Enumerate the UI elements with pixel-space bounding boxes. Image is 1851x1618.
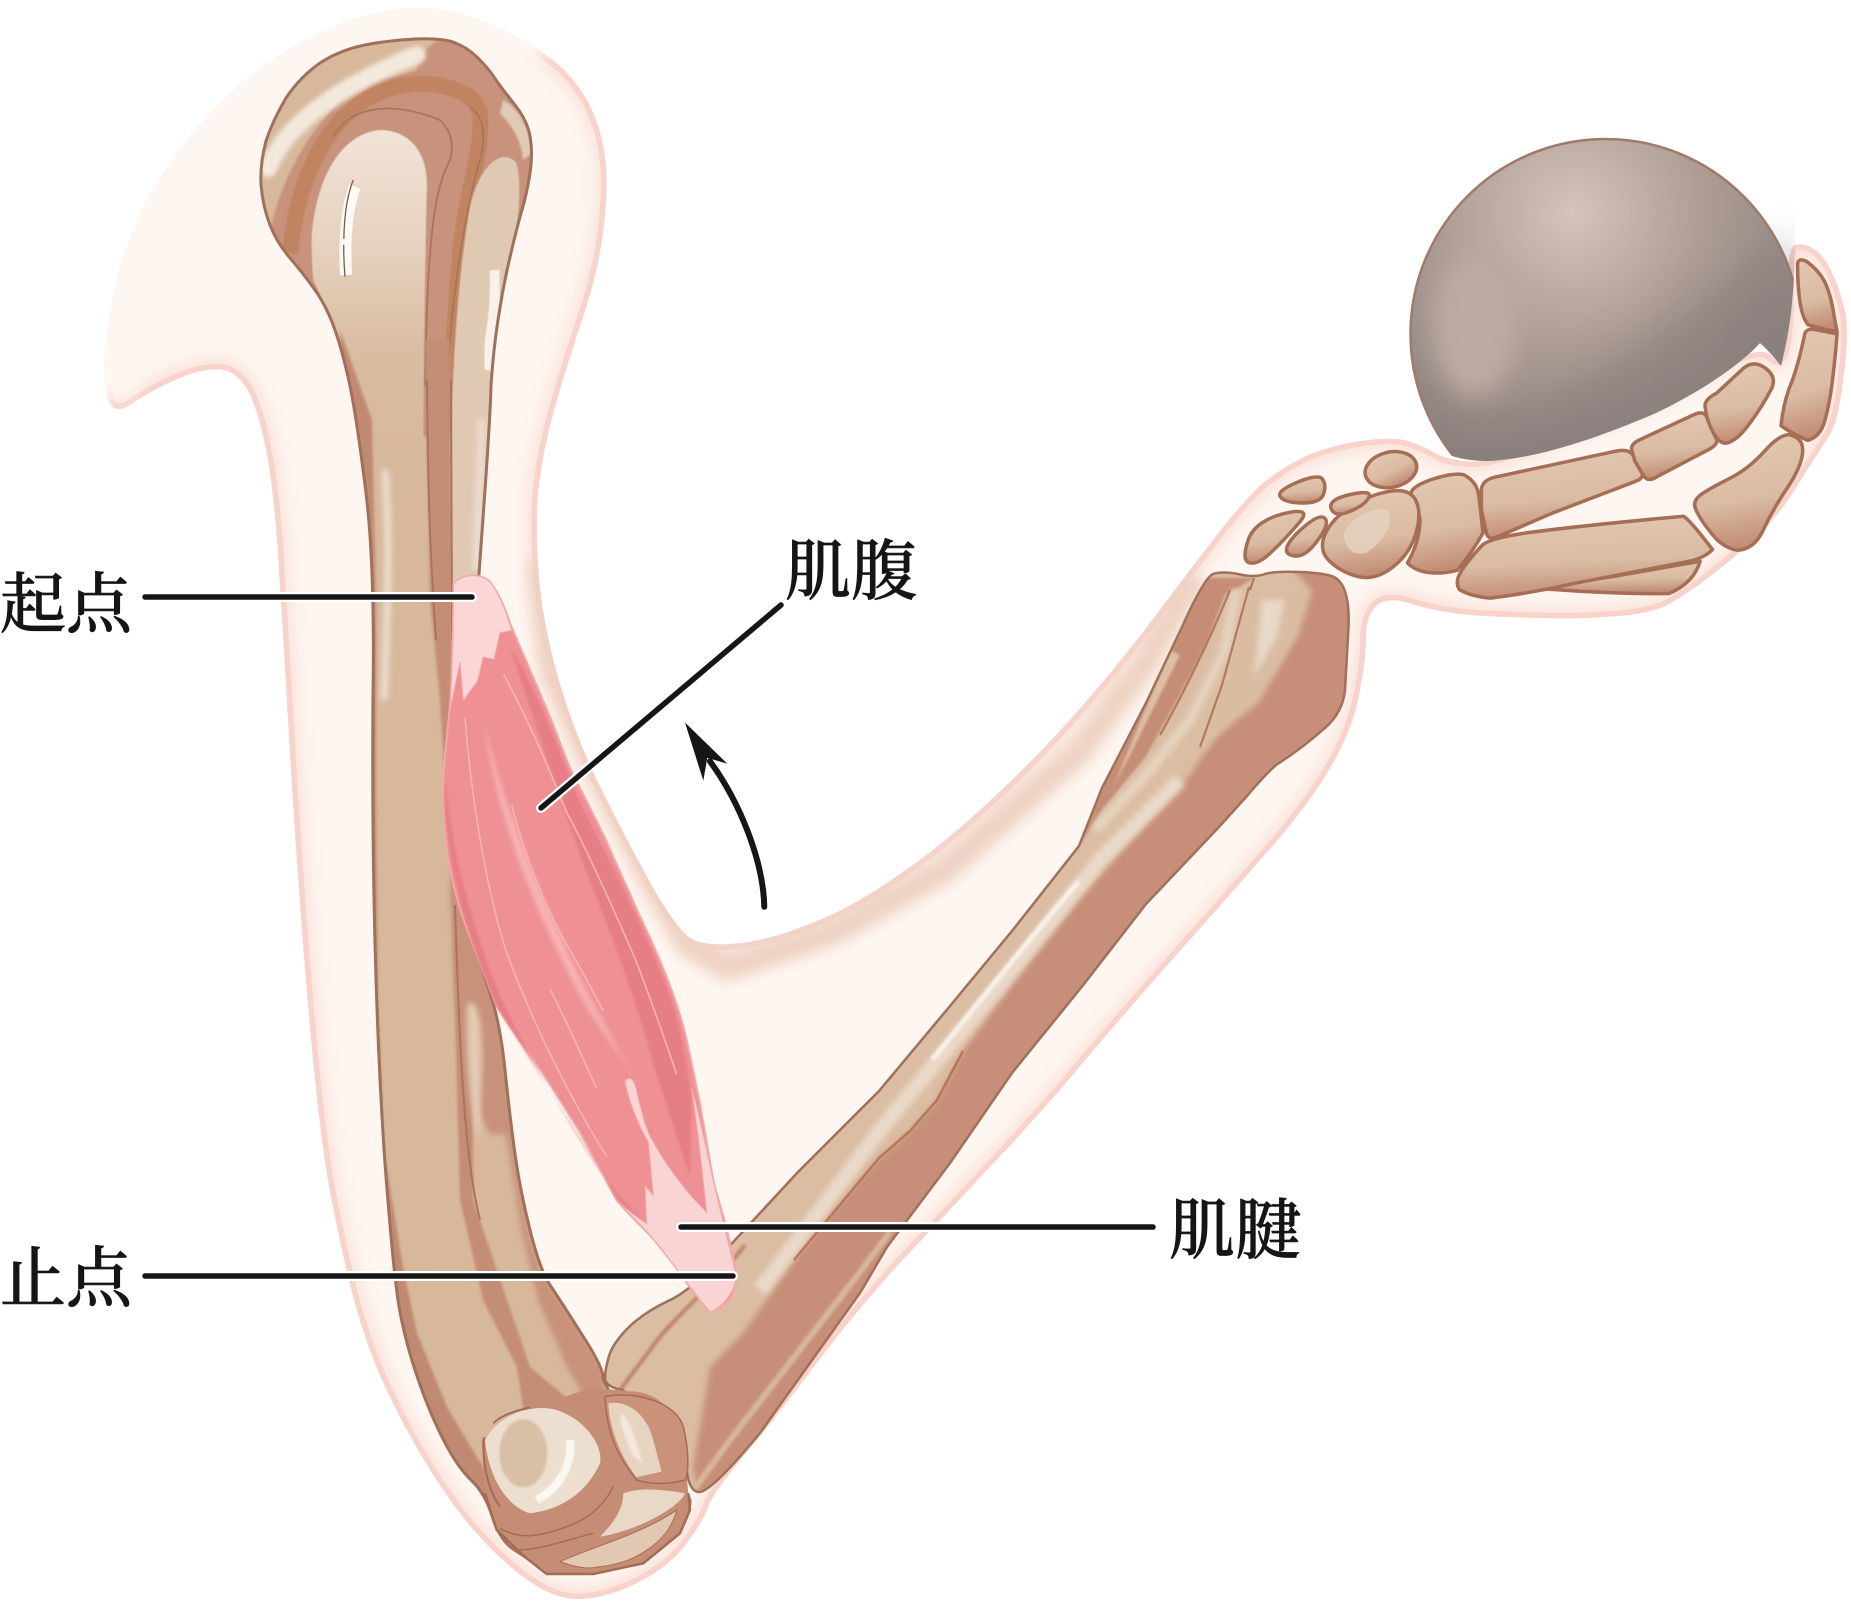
- shaft pale core: [311, 130, 428, 438]
- label: muscle belly: 肌腹: [785, 536, 917, 609]
- humerus right dark edge: [504, 1131, 606, 1392]
- forearm dark underside: [693, 565, 1370, 1500]
- muscle belly: [443, 576, 737, 1312]
- small carpal A: [1280, 477, 1325, 503]
- carpal highlight: [1343, 509, 1390, 554]
- wrist right pale: [1208, 734, 1219, 748]
- forearm lower thin strip: [695, 1232, 890, 1488]
- arrow: flexion direction: [685, 722, 764, 907]
- leader line: origin: [145, 592, 472, 602]
- wrist left dark band: [1079, 578, 1254, 846]
- forearm bones: [605, 565, 1370, 1500]
- forearm inner fold: [794, 1051, 963, 1260]
- right shaft pale: [452, 156, 520, 438]
- humerus head shading: [262, 41, 530, 438]
- small carpal D: [1286, 517, 1326, 556]
- small carpal C: [1245, 511, 1304, 563]
- humerus (upper arm bone): [261, 39, 690, 1573]
- thumb proximal phalanx: [1695, 435, 1803, 550]
- thumb middle phalanx: [1781, 329, 1837, 440]
- upper metacarpal: [1481, 450, 1642, 538]
- label: origin: 起点: [0, 569, 134, 642]
- muscle: biceps: [443, 576, 737, 1312]
- thumb distal phalanx: [1798, 260, 1837, 331]
- lower metacarpal: [1457, 516, 1713, 598]
- finger middle phalanx: [1632, 413, 1717, 479]
- leader line: muscle belly: [541, 605, 781, 808]
- small carpal B: [1331, 493, 1369, 514]
- top tendon: [450, 576, 512, 710]
- lower dark section behind muscle: [450, 880, 514, 1134]
- forearm highlight: [760, 780, 1180, 1290]
- head arch stripe: [290, 83, 480, 437]
- metacarpal base: [1408, 474, 1483, 573]
- label: insertion: 止点: [0, 1243, 134, 1316]
- lower metacarpal back: [1532, 561, 1700, 594]
- trochlea disc: [484, 1407, 600, 1513]
- ball held in hand: [1409, 138, 1795, 461]
- leader line: insertion: [145, 1271, 733, 1281]
- leader line: tendon: [681, 1222, 1153, 1232]
- elbow lower bands: [600, 1489, 685, 1537]
- muscle fibres: [465, 674, 677, 1157]
- elbow joint: [482, 1389, 690, 1574]
- hand bones: [1245, 260, 1837, 598]
- oval carpal bone: [1358, 445, 1424, 494]
- humerus pale streaks: [384, 420, 482, 700]
- label: tendon: 肌腱: [1169, 1195, 1301, 1268]
- muscle shading: [510, 647, 692, 1176]
- bottom tendon: [617, 1078, 737, 1312]
- capitulum: [605, 1395, 688, 1483]
- finger distal phalanx: [1705, 364, 1773, 443]
- large carpal bone: [1322, 491, 1419, 578]
- humerus left dark band: [339, 332, 485, 1494]
- head top streak: [268, 55, 417, 168]
- humerus central dark stripe: [425, 340, 566, 1410]
- head right knob: [500, 100, 532, 160]
- humerus right light strip: [452, 503, 482, 583]
